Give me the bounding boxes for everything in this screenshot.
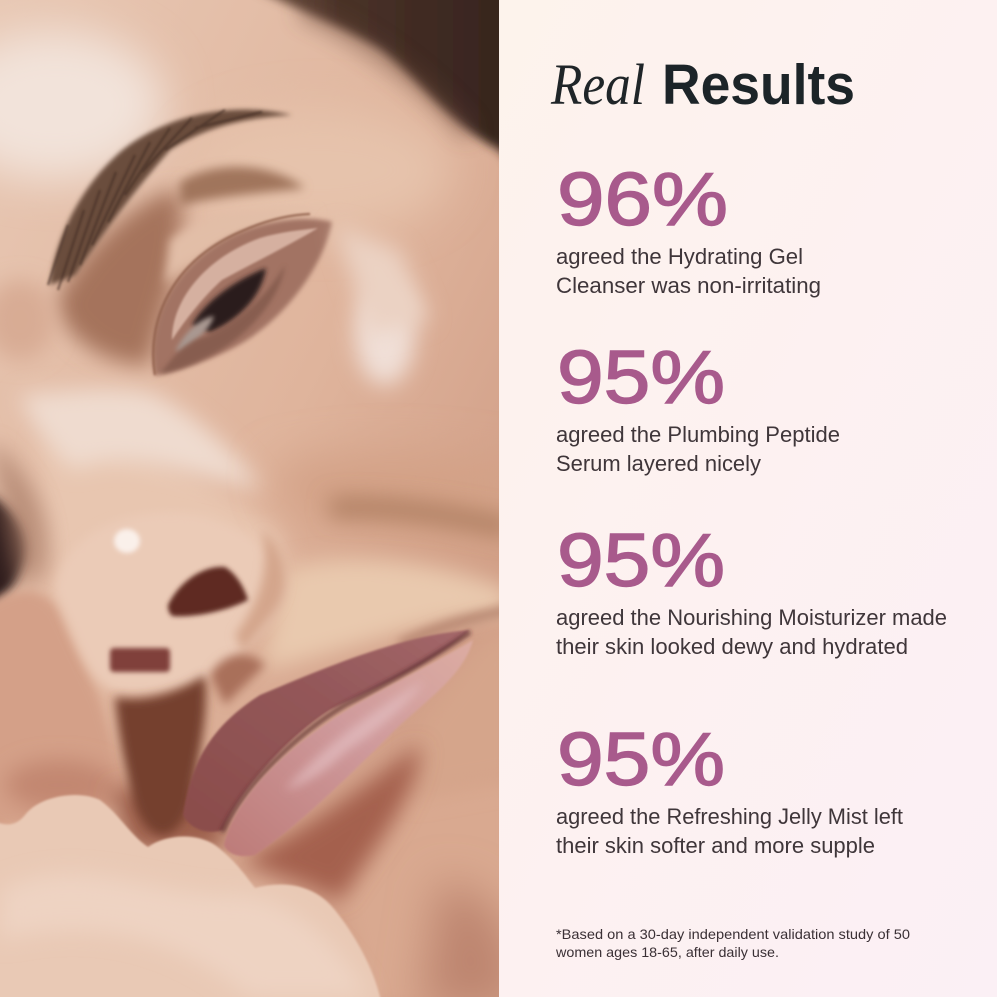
other eye shadow [0,490,26,610]
footnote: women ages 18-65, after daily use. [555,944,779,960]
upper cheek glow [335,225,430,335]
philtrum shadow [115,675,206,835]
upper lip [183,630,470,832]
heading: Real Results: Results [662,53,855,117]
nose [56,565,266,694]
under-eye highlight [20,389,265,490]
stat: 95% Refreshing Jelly Mist: 95% [557,717,725,801]
skin base [0,0,499,997]
heading: Real Results [550,52,855,117]
lip line [222,632,470,832]
lower left cheek shadow [5,760,115,810]
stat: 95% Refreshing Jelly Mist: agreed the Refreshing Jelly Mist left [556,804,903,829]
nose rim shadow [235,530,286,652]
heading: Real Results: Real [550,52,645,117]
stat: 95% Nourishing Moisturizer: their skin looked dewy and hydrated [556,634,908,659]
eyelid and eye [153,214,332,376]
background panel [499,0,997,997]
lower cheek tone [280,455,442,522]
chin and lower face [350,784,499,997]
footnote: *Based on a 30-day independent validation study of 50 [556,926,910,942]
stat: 95% Plumbing Peptide Serum: Serum layered nicely [556,451,761,476]
left shading by brow [0,280,55,360]
lower chin shading [410,877,499,997]
stat: 96% Hydrating Gel Cleanser: 96% [557,157,728,241]
footnote [555,926,910,960]
forehead mid tone [248,122,446,222]
shadow beside philtrum [210,655,265,705]
hand [0,795,382,1000]
eyebrow [48,110,292,290]
stat: 95% Nourishing Moisturizer: 95% [557,518,725,602]
stat: 95% Plumbing Peptide Serum: agreed the Plumbing Peptide [556,422,840,447]
stat: 95% Refreshing Jelly Mist: their skin softer and more supple [556,833,875,858]
stat: 95% Plumbing Peptide Serum: 95% [557,335,725,419]
stat: 96% Hydrating Gel Cleanser [556,157,821,298]
lower lip shine [288,686,418,790]
lower lip [224,640,473,856]
hair soft edge [300,10,470,135]
bridge of nose [50,464,288,562]
hair [264,0,499,162]
eye socket shadow [55,190,182,365]
nasolabial fold [330,507,510,528]
left cheek [0,591,130,830]
shadow under lower lip [240,745,420,900]
photo: close-up of face [0,0,520,1000]
stat: 96% Hydrating Gel Cleanser: Cleanser was non-irritating [556,273,821,298]
lip corner shadow [400,610,510,645]
cheek above lip [262,560,510,670]
stat: 95% Nourishing Moisturizer [556,518,947,659]
hand shading [0,874,370,997]
nose tip highlight [114,529,140,553]
forehead highlight [0,30,165,180]
stat: 95% Refreshing Jelly Mist [556,717,903,858]
stat: 95% Plumbing Peptide Serum [556,335,840,476]
lid highlight [161,227,198,284]
stat: 96% Hydrating Gel Cleanser: agreed the Hydrating Gel [556,244,803,269]
shadow under philtrum [110,780,225,850]
other eye halo [0,440,47,590]
stat: 95% Nourishing Moisturizer: agreed the Nourishing Moisturizer made [556,605,947,630]
cheek right of lip [431,648,499,770]
cheek highlight [355,285,415,385]
nostrils [110,567,248,672]
crease shadow [180,167,305,205]
